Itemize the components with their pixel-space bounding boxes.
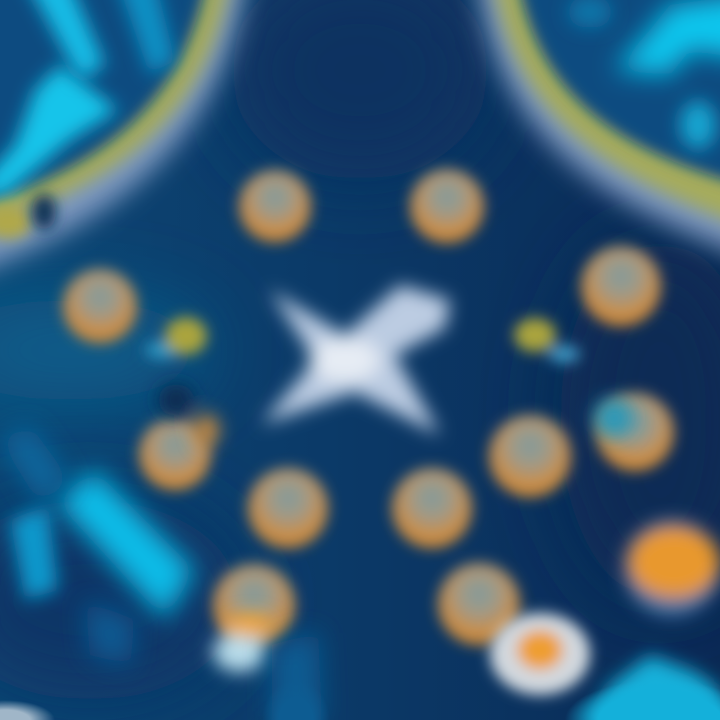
panel: lower-right cyan shape [565, 640, 720, 720]
icon: orange planet [624, 520, 720, 616]
icon: disc details [158, 384, 634, 446]
icon: bright glow below lower left disc [213, 615, 274, 672]
panel: lower-left cyan shapes [0, 425, 330, 720]
panel: top-left globe [0, 0, 250, 285]
panel: top-right globe [474, 0, 720, 270]
icon: central white cross [262, 285, 450, 435]
icon: small left comet [145, 317, 207, 359]
icon: small right comet [514, 318, 580, 363]
icon: white ring with orange core [490, 613, 590, 695]
icon: node discs [63, 169, 674, 646]
